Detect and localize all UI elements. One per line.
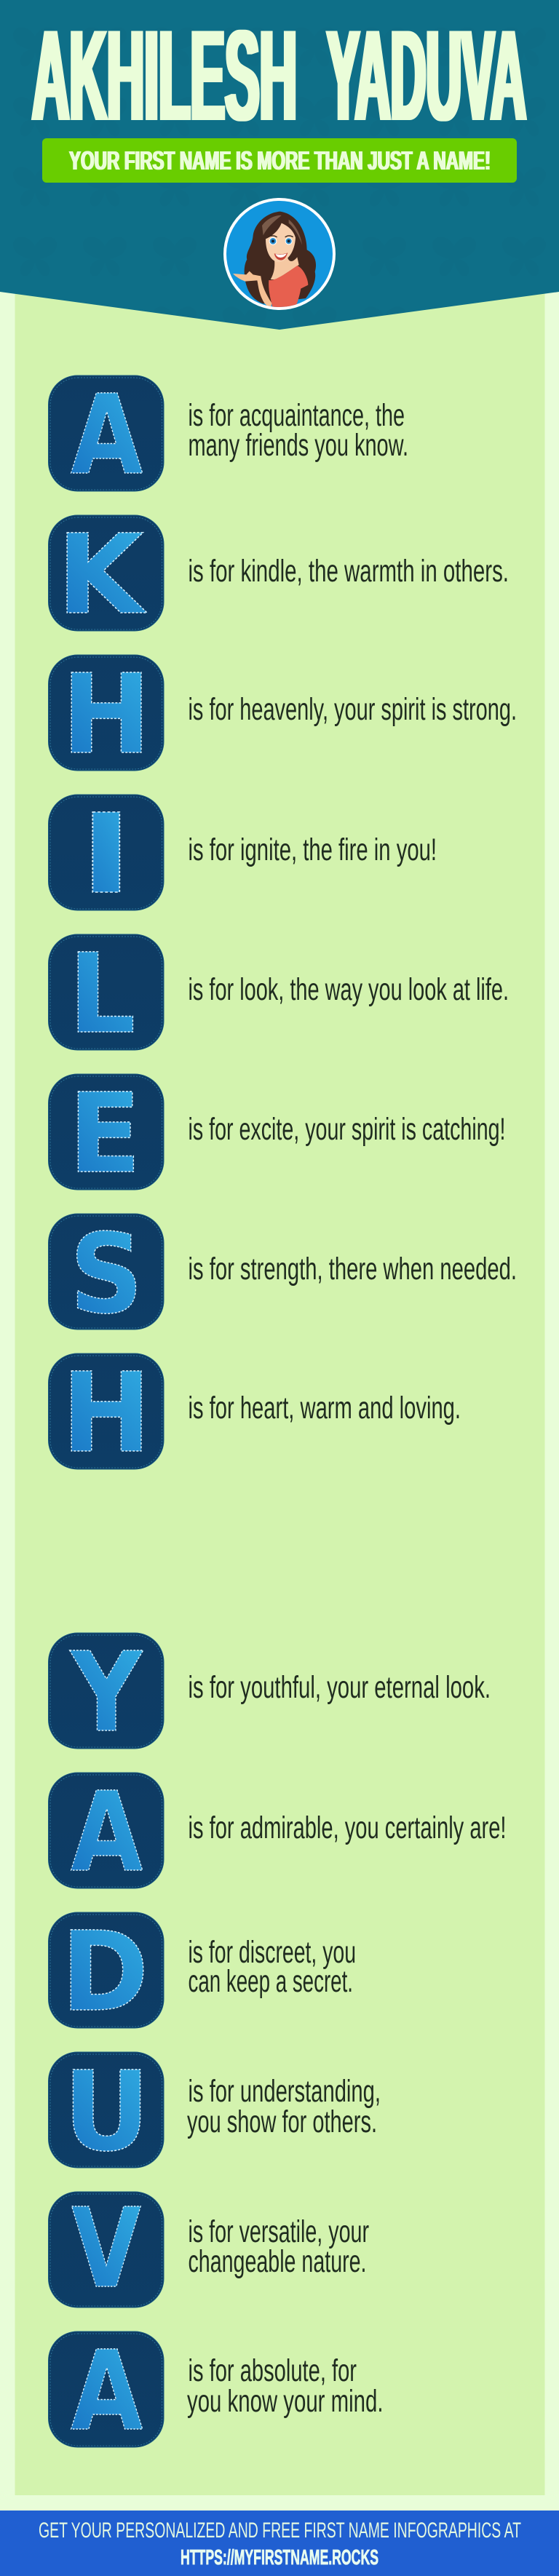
tile A: A xyxy=(71,372,143,500)
text A: many friends you know. xyxy=(188,428,408,463)
row D: discreet xyxy=(48,1908,356,2036)
row H: heavenly xyxy=(48,651,517,779)
tile L xyxy=(48,930,164,1058)
tile Y: Y xyxy=(69,1629,143,1757)
tile Y xyxy=(48,1629,164,1757)
text A: is for absolute, for xyxy=(188,2353,357,2388)
text A: is for acquaintance, the xyxy=(188,398,405,433)
tile E: E xyxy=(68,1070,141,1198)
tile S: S xyxy=(70,1211,143,1338)
text I: is for ignite, the fire in you! xyxy=(188,832,437,867)
tile E xyxy=(48,1070,164,1198)
footer url: HTTPS://MYFIRSTNAME.ROCKS xyxy=(181,2546,378,2569)
tile A xyxy=(48,1769,164,1897)
text A xyxy=(187,2353,383,2419)
row A: acquaintance xyxy=(48,372,408,500)
header banner xyxy=(0,0,559,330)
tile V xyxy=(48,2185,164,2313)
text U: you show for others. xyxy=(187,2104,377,2139)
row V: versatile xyxy=(48,2185,369,2313)
row S: strength xyxy=(48,1211,517,1338)
text U xyxy=(187,2074,381,2139)
row H: heart xyxy=(48,1350,461,1478)
row K: kindle xyxy=(48,510,509,639)
text D xyxy=(188,1935,356,1999)
text V: changeable nature. xyxy=(188,2244,367,2279)
row I: ignite xyxy=(48,790,437,918)
tile I: I xyxy=(79,790,132,918)
tile A: A xyxy=(71,1769,143,1897)
tile K: K xyxy=(57,510,147,639)
row A: absolute xyxy=(48,2328,383,2456)
tile H: H xyxy=(62,651,151,779)
subtitle banner xyxy=(42,138,517,183)
text V: is for versatile, your xyxy=(188,2214,369,2249)
tile D: D xyxy=(61,1908,148,2036)
text D: is for discreet, you xyxy=(188,1935,356,1970)
text V xyxy=(188,2214,369,2279)
tile L: L xyxy=(68,930,135,1058)
row Y: youthful xyxy=(48,1629,491,1757)
text D: can keep a secret. xyxy=(188,1964,353,1999)
text A: you know your mind. xyxy=(187,2384,383,2419)
row A: admirable xyxy=(48,1769,507,1897)
row L: look xyxy=(48,930,509,1058)
tile A xyxy=(48,372,164,500)
tile U: U xyxy=(63,2048,150,2177)
row E: excite xyxy=(48,1070,505,1198)
tile A xyxy=(48,2328,164,2456)
text A xyxy=(188,398,408,463)
tile S xyxy=(48,1211,164,1338)
tile I xyxy=(48,790,164,918)
tile V: V xyxy=(71,2185,141,2313)
footer bar xyxy=(0,2511,559,2576)
text U: is for understanding, xyxy=(188,2074,381,2109)
avatar: cartoon woman in a circle xyxy=(223,198,336,310)
row U: understanding xyxy=(48,2048,381,2177)
tile A: A xyxy=(71,2328,143,2456)
tile H: H xyxy=(62,1350,151,1478)
